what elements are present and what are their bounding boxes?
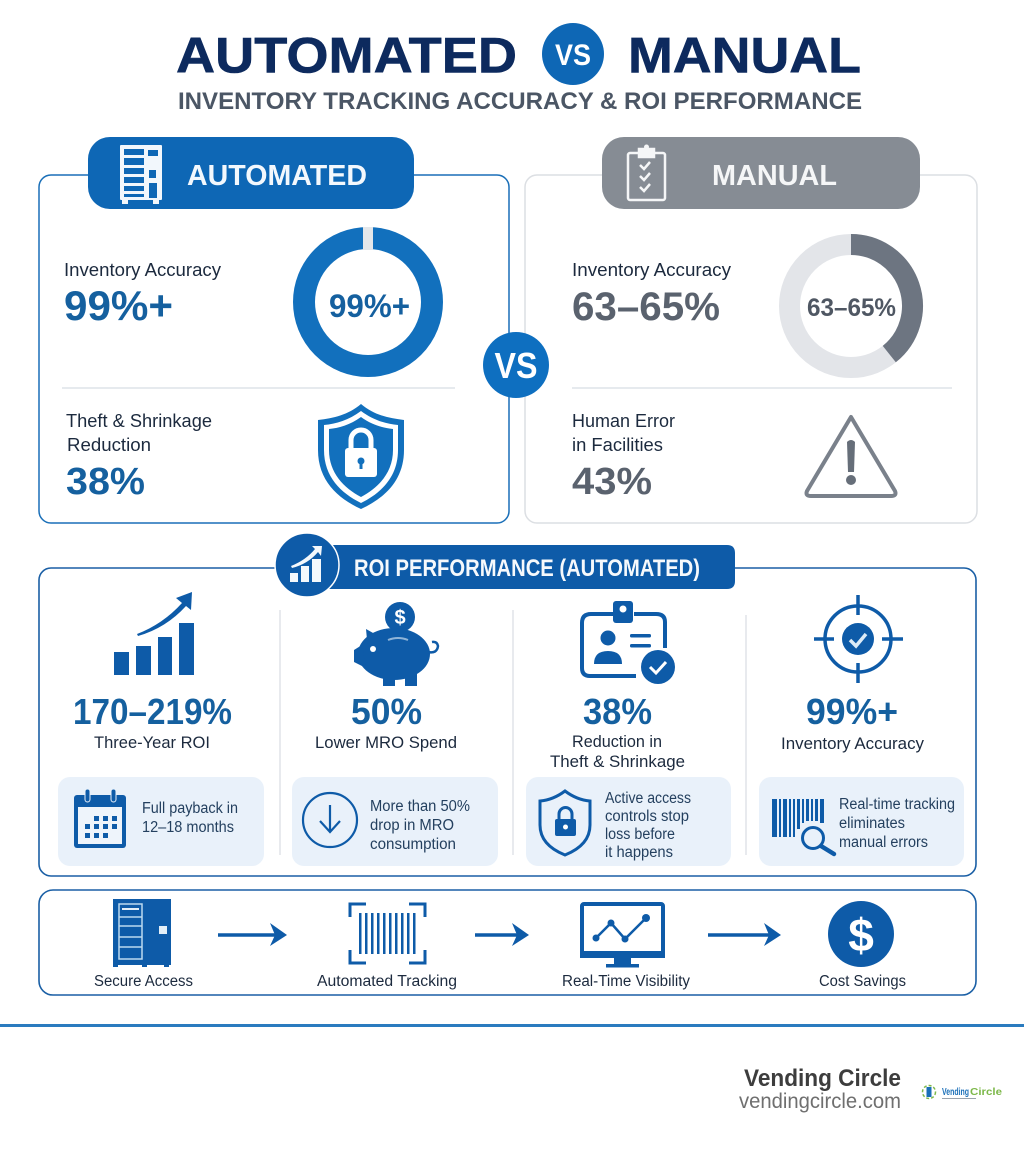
mro card text: consumption: [370, 836, 456, 853]
automated header pill: AUTOMATED: [187, 160, 367, 192]
panel: process flow: [39, 890, 976, 995]
access control text: loss before: [605, 826, 675, 843]
arrow: [708, 923, 781, 946]
theft and shrinkage label: Theft & Shrinkage: [66, 411, 212, 431]
chart: manual accuracy donut: [790, 244, 912, 368]
theft label: Theft & Shrinkage: [550, 752, 685, 771]
panel: automated: [39, 137, 509, 523]
human error label: [572, 411, 675, 455]
column: lower mro spend: [292, 602, 498, 866]
icon: shield outline with lock: [540, 791, 590, 855]
automated tracking label: Automated Tracking: [317, 973, 457, 990]
icon: secure access machine: [113, 899, 171, 967]
theft and shrinkage value: 38%: [66, 461, 145, 503]
panel: roi performance: [39, 533, 976, 876]
vs badge: [483, 332, 549, 398]
icon: barcode with magnifier: [772, 799, 834, 854]
tracking text: eliminates: [839, 815, 905, 832]
icon: monitor with trend line: [580, 904, 665, 968]
tracking text: manual errors: [839, 834, 928, 851]
tracking card: [759, 777, 964, 866]
vs badge: VS: [494, 345, 538, 386]
icon: id badge with check: [582, 601, 675, 684]
tracking text: Real-time tracking: [839, 796, 955, 813]
icon: dollar coin: [828, 901, 894, 967]
automated header pill: [88, 137, 414, 209]
roi value: 170–219%: [73, 691, 232, 732]
column: theft reduction: [526, 601, 731, 866]
mro card text: [370, 798, 470, 853]
icon: warning triangle: [806, 417, 896, 496]
footer logo: Vending: [942, 1087, 969, 1098]
manual header pill: MANUAL: [712, 160, 837, 192]
icon: target with check: [814, 595, 903, 683]
mro value: 50%: [351, 691, 422, 732]
inventory accuracy label: Inventory Accuracy: [64, 260, 221, 280]
icon: barcode scanner frame: [350, 904, 425, 963]
theft value: 38%: [583, 691, 652, 732]
mro card: [292, 777, 498, 866]
mro card text: More than 50%: [370, 798, 470, 815]
arrow: [475, 923, 529, 946]
arrow: [218, 923, 287, 946]
icon: shield with lock: [318, 404, 404, 509]
footer brand text: vendingcircle.com: [739, 1090, 901, 1113]
access control text: it happens: [605, 844, 673, 861]
accuracy label: Inventory Accuracy: [781, 734, 924, 753]
chart: manual accuracy donut: 63–65%: [807, 294, 896, 322]
icon: calendar: [74, 789, 126, 848]
icon: piggy bank: $: [394, 607, 406, 629]
manual header pill: [602, 137, 920, 209]
manual accuracy value: 63–65%: [572, 285, 720, 329]
theft label: [550, 732, 685, 771]
icon: vending machine: [120, 145, 162, 204]
icon: piggy bank: [354, 602, 438, 686]
footer logo: Circle: [970, 1087, 1003, 1098]
title: MANUAL: [628, 28, 861, 84]
icon: rising bar chart: [114, 592, 194, 675]
subtitle: INVENTORY TRACKING ACCURACY & ROI PERFORMANCE: [178, 88, 862, 115]
footer brand text: Vending Circle: [744, 1065, 901, 1092]
access control text: controls stop: [605, 808, 689, 825]
chart: automated accuracy donut: 99%+: [329, 288, 410, 324]
accuracy value: 99%+: [806, 691, 898, 732]
title: AUTOMATED: [176, 28, 517, 84]
roi label: Three-Year ROI: [94, 733, 210, 752]
secure access label: Secure Access: [94, 973, 193, 990]
tracking text: [839, 796, 955, 851]
access control card: [526, 777, 731, 866]
footer logo: [922, 1086, 1003, 1099]
footer brand text: [739, 1065, 901, 1113]
theft and shrinkage label: [66, 411, 212, 455]
real-time visibility label: Real-Time Visibility: [562, 973, 690, 990]
access control text: Active access: [605, 790, 691, 807]
cost savings label: Cost Savings: [819, 973, 906, 990]
panel: manual: [525, 137, 977, 523]
title: VS: [555, 39, 591, 72]
icon: dollar coin: $: [848, 909, 874, 961]
payback text: 12–18 months: [142, 819, 234, 836]
mro label: Lower MRO Spend: [315, 733, 457, 752]
mro card text: drop in MRO: [370, 817, 454, 834]
column: inventory accuracy: [759, 595, 964, 866]
inventory accuracy value: 99%+: [64, 282, 173, 329]
theft and shrinkage label: Reduction: [67, 435, 151, 455]
access control text: [605, 790, 691, 861]
payback text: [142, 800, 238, 836]
payback card: [58, 777, 264, 866]
human error label: in Facilities: [572, 435, 663, 455]
theft label: Reduction in: [572, 732, 662, 751]
title: [176, 23, 861, 85]
roi header: ROI PERFORMANCE (AUTOMATED): [354, 555, 700, 582]
icon: down arrow in circle: [303, 793, 357, 847]
icon: clipboard: [628, 144, 665, 200]
icon: small growth chart: [290, 546, 322, 582]
human error label: Human Error: [572, 411, 675, 431]
chart: automated accuracy donut: [304, 227, 432, 366]
manual accuracy label: Inventory Accuracy: [572, 260, 731, 280]
roi header: [275, 533, 735, 597]
human error value: 43%: [572, 461, 652, 503]
payback text: Full payback in: [142, 800, 238, 817]
column: three-year roi: [58, 592, 264, 866]
